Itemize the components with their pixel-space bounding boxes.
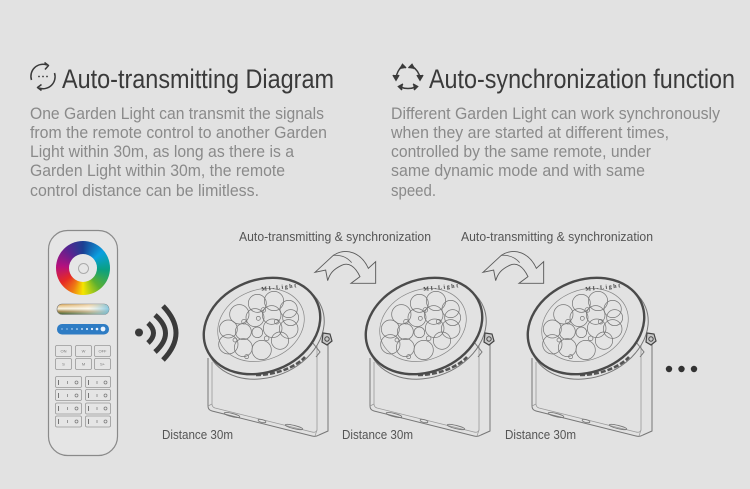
remote brightness slider — [57, 324, 109, 334]
text block: auto-synchronization description — [390, 105, 721, 200]
text block: auto-transmitting description: One Garden Light can transmit the signals — [30, 105, 324, 123]
text block: auto-synchronization description: when they are started at different times, — [390, 124, 669, 142]
icon: auto-synchronization cycle — [393, 64, 423, 90]
text block: auto-synchronization description: controlled by the same remote, under — [391, 143, 651, 161]
text block: auto-transmitting description: control distance can be limitless. — [30, 182, 259, 200]
icon: wireless signal — [135, 306, 176, 360]
remote buttons: S — [62, 362, 65, 366]
remote buttons: S+ — [100, 362, 106, 366]
text block: auto-synchronization description: same dynamic mode and with same — [391, 162, 645, 180]
heading: Auto-transmitting Diagram: Auto-transmitting Diagram — [62, 64, 334, 94]
icon: auto-transmitting cycle — [31, 62, 55, 90]
remote buttons: OFF — [98, 348, 107, 354]
label: distance to light 3: Distance 30m — [505, 427, 576, 442]
continuation dots — [666, 366, 697, 372]
text block: auto-transmitting description: from the remote control to another Garden — [30, 124, 327, 142]
label: distance to light 2: Distance 30m — [342, 427, 413, 442]
garden light 3: MI-Light — [585, 283, 621, 293]
label: distance to light 1: Distance 30m — [162, 427, 233, 442]
garden light 1: MI-Light — [261, 283, 297, 293]
text block: auto-transmitting description: Light within 30m, as long as there is a — [30, 143, 295, 161]
text block: auto-transmitting description: Garden Light within 30m, the remote — [30, 162, 285, 180]
caption: first auto-transmitting and synchronization: Auto-transmitting & synchronization — [239, 229, 431, 244]
garden light 3 — [513, 261, 663, 436]
remote control body — [48, 230, 118, 456]
remote colour-temperature strip — [57, 304, 109, 314]
garden light 2 — [351, 261, 501, 436]
garden light 2: MI-Light — [423, 283, 459, 293]
remote buttons — [56, 346, 110, 427]
text block: auto-synchronization description: Different Garden Light can work synchronously — [391, 105, 721, 123]
remote buttons: M — [82, 362, 85, 366]
text block: auto-transmitting description — [30, 105, 327, 200]
remote buttons: W — [82, 348, 86, 354]
arrow: first relay — [315, 251, 376, 283]
remote buttons: ON — [60, 348, 67, 354]
remote colour wheel — [56, 241, 110, 295]
arrow: second relay — [483, 251, 544, 283]
caption: second auto-transmitting and synchronization: Auto-transmitting & synchronization — [461, 229, 653, 244]
garden light 1 — [189, 261, 339, 436]
text block: auto-synchronization description: speed. — [391, 182, 436, 200]
